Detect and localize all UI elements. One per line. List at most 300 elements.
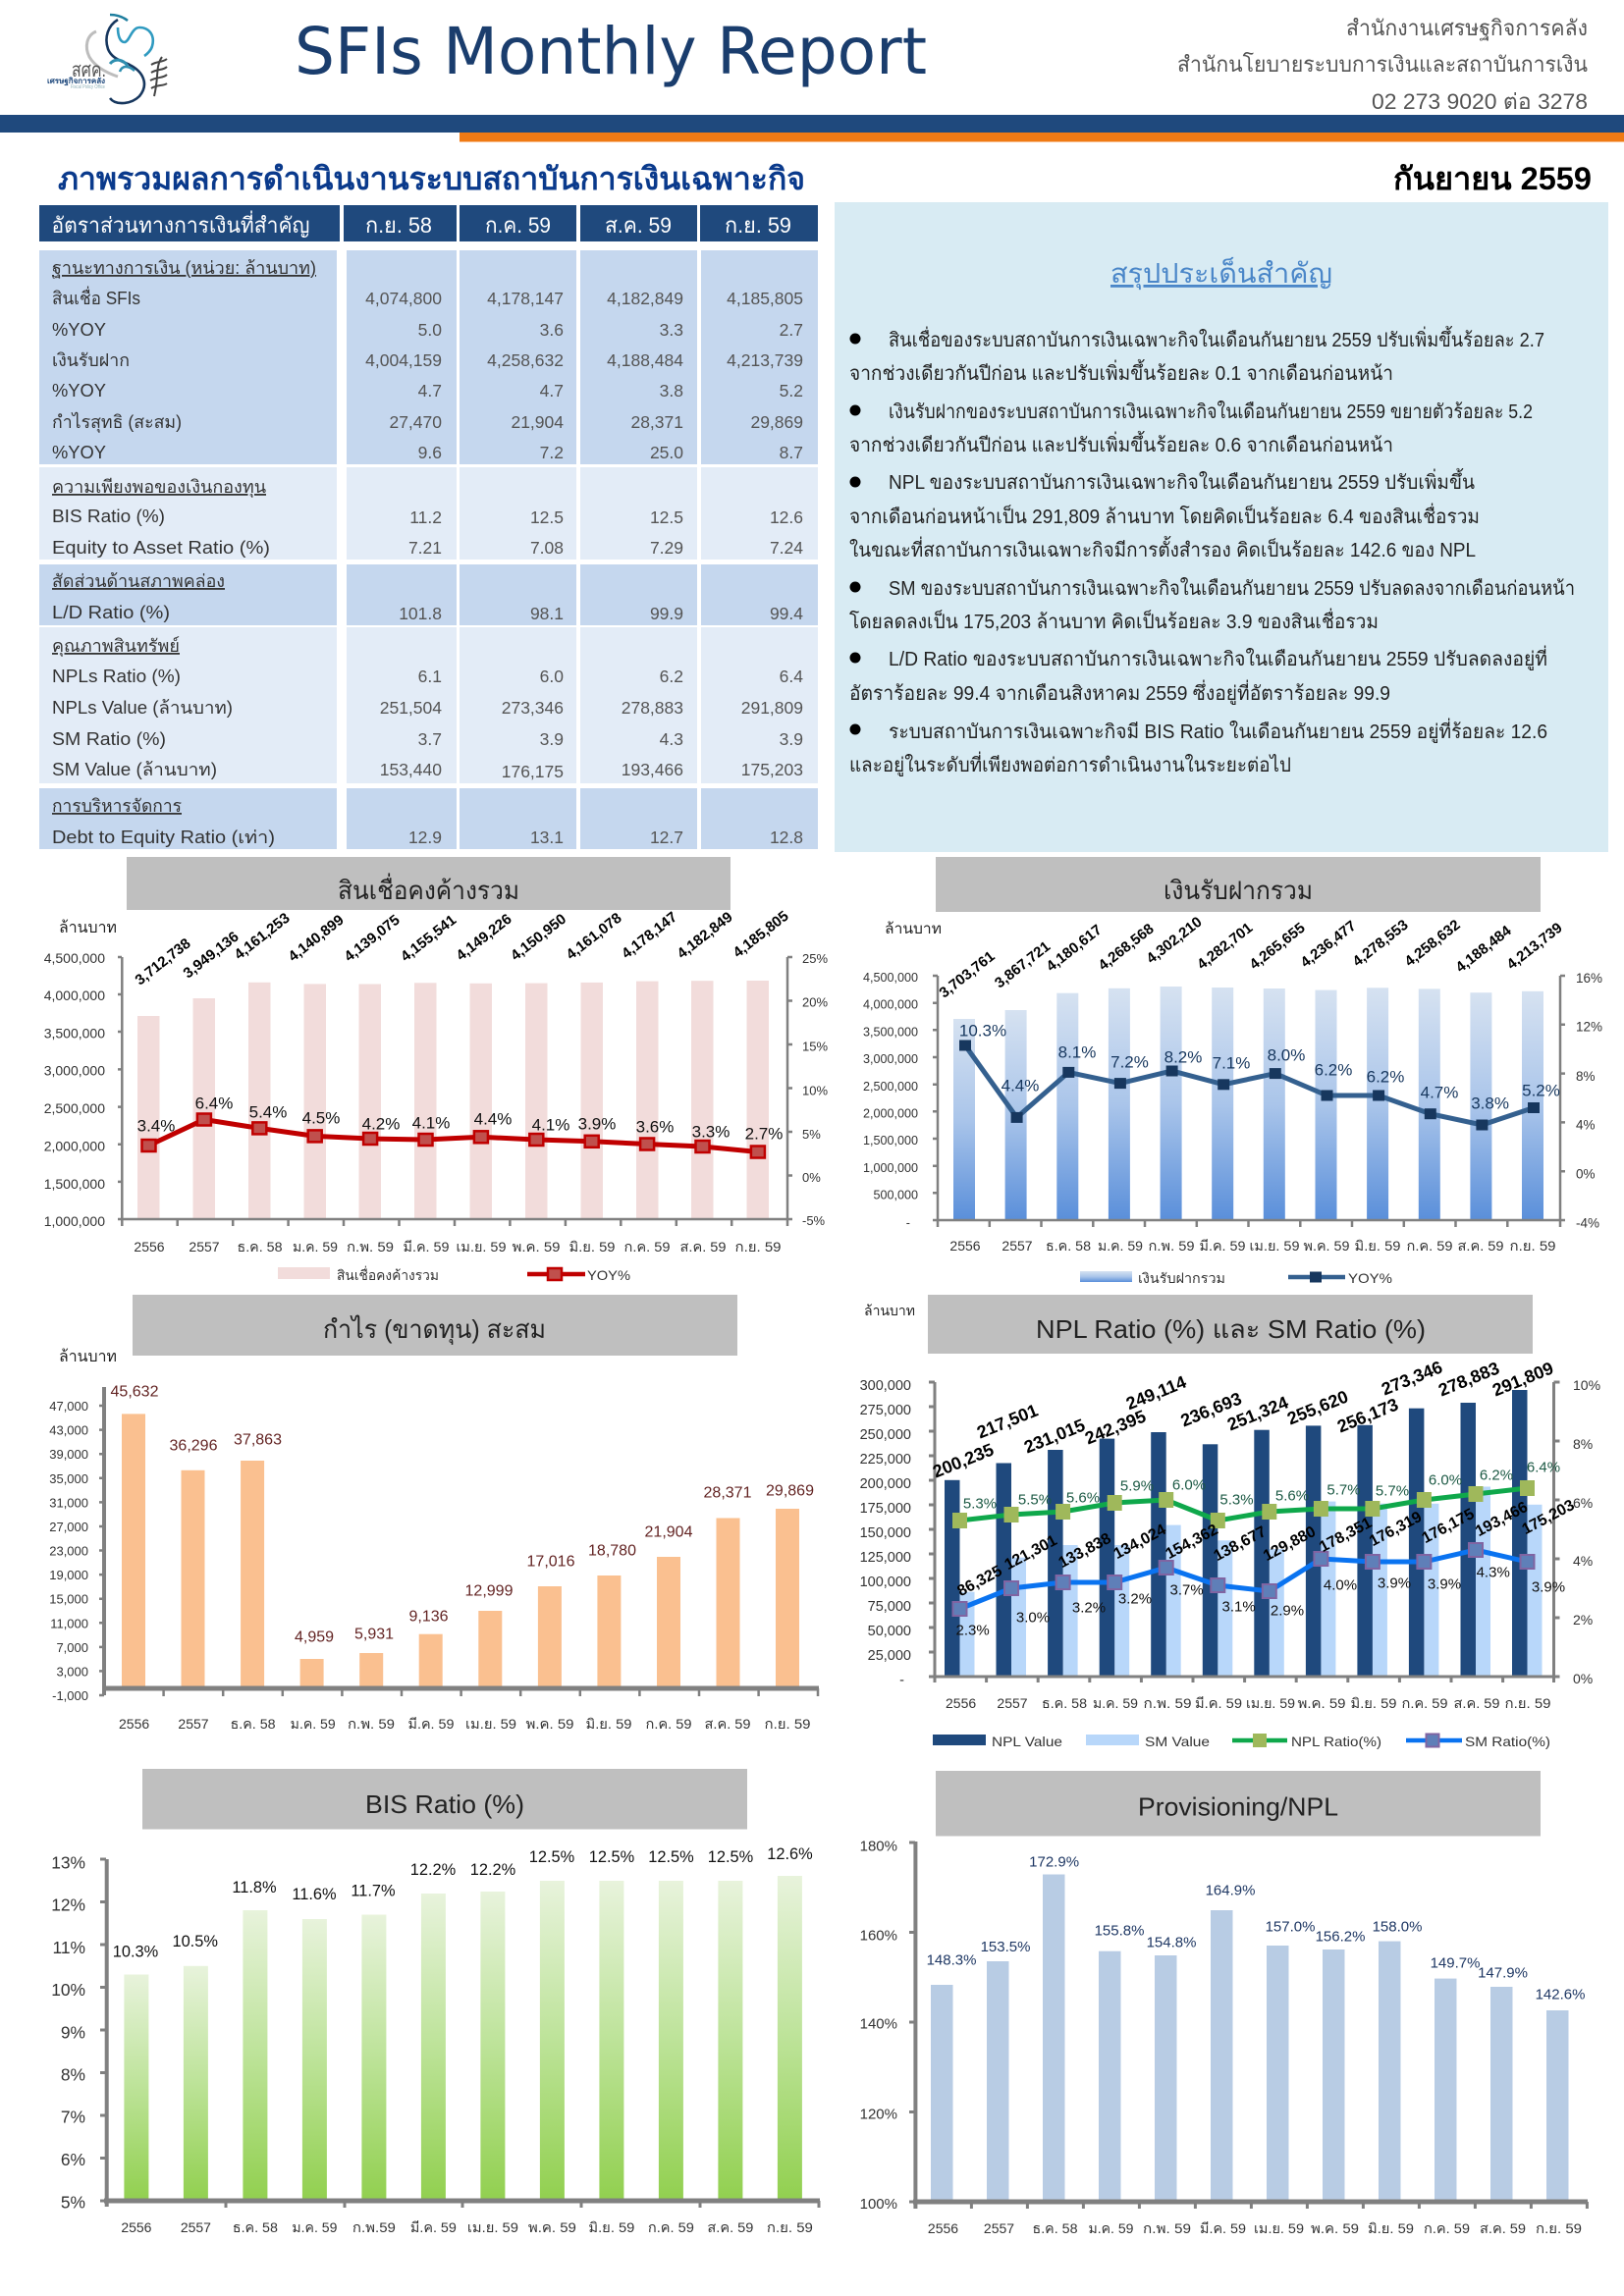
summary text: [849, 326, 1575, 777]
right axis labels: 8%: [1573, 1436, 1593, 1452]
bar value labels: 12.6%: [767, 1845, 813, 1863]
NPL ratio labels: 5.5%: [1018, 1492, 1052, 1508]
table values: 9.6: [418, 443, 442, 462]
category labels: มี.ค. 59: [1200, 1238, 1246, 1254]
summary text: โดยลดลงเป็น 175,203 ล้านบาท คิดเป็นร้อยละ 3.9 ของสินเชื่อรวม: [849, 608, 1379, 633]
table values: 12.5: [530, 507, 564, 527]
YOY data labels: 3.8%: [1471, 1094, 1509, 1113]
table values: 4.7: [418, 381, 442, 400]
table values: 291,809: [741, 698, 803, 718]
left axis labels: 100%: [860, 2196, 897, 2213]
summary text: ในขณะที่สถาบันการเงินเฉพาะกิจมีการตั้งสำรอง คิดเป็นร้อยละ 142.6 ของ NPL: [849, 536, 1476, 561]
category labels: ม.ค. 59: [292, 2219, 338, 2235]
table values: 4,258,632: [487, 350, 564, 370]
right axis labels: 4%: [1573, 1553, 1593, 1569]
legend: [933, 1734, 1550, 1749]
table row labels: เงินรับฝาก: [52, 350, 130, 370]
chart heading: [133, 1295, 737, 1356]
left axis labels: 9%: [61, 2022, 85, 2042]
SM ratio labels: 3.0%: [1016, 1610, 1050, 1626]
SM value labels: 138,677: [1211, 1523, 1270, 1565]
category labels: ก.ค. 59: [1402, 1695, 1448, 1711]
panel: key points summary: [835, 202, 1608, 852]
left axis labels: 150,000: [860, 1525, 911, 1541]
legend: NPL Value: [992, 1734, 1062, 1749]
summary text: และอยู่ในระดับที่เพียงพอต่อการดำเนินงานในระยะต่อไป: [849, 751, 1291, 777]
bar value labels: 4,155,541: [398, 912, 460, 965]
NPL ratio labels: 5.7%: [1326, 1482, 1361, 1498]
summary text: สินเชื่อของระบบสถาบันการเงินเฉพาะกิจในเดือนกันยายน 2559 ปรับเพิ่มขึ้นร้อยละ 2.7: [889, 326, 1544, 351]
table values: 7.08: [530, 538, 564, 558]
left axis labels: 120%: [860, 2107, 897, 2122]
left axis labels: [49, 1399, 88, 1703]
table values: 4,185,805: [727, 289, 803, 308]
table values: 99.9: [650, 604, 683, 623]
category labels: 2557: [178, 1716, 209, 1732]
table values: 98.1: [530, 604, 564, 623]
right axis labels: -5%: [802, 1213, 826, 1228]
bar value labels: 4,185,805: [730, 908, 792, 961]
right axis labels: 2%: [1573, 1612, 1593, 1628]
right axis labels: -4%: [1576, 1215, 1599, 1231]
category labels: 2556: [119, 1716, 149, 1732]
left axis labels: 140%: [860, 2016, 897, 2032]
YOY data labels: [137, 1094, 783, 1143]
left axis labels: 2,500,000: [44, 1100, 105, 1116]
YOY data labels: 4.7%: [1421, 1084, 1458, 1101]
left axis labels: 6%: [61, 2150, 85, 2169]
left axis labels: [51, 1853, 85, 2212]
NPL value labels: 278,883: [1435, 1359, 1502, 1400]
chart heading: Provisioning/NPL: [1138, 1792, 1338, 1822]
panel: financial ratio table: [39, 205, 818, 849]
YOY data labels: 4.4%: [474, 1109, 512, 1129]
legend: [1080, 1270, 1392, 1286]
summary text: จากเดือนก่อนหน้าเป็น 291,809 ล้านบาท โดยคิดเป็นร้อยละ 6.4 ของสินเชื่อรวม: [849, 503, 1480, 528]
NPL value bars: [945, 1390, 1528, 1677]
category labels: ก.ค. 59: [1406, 1238, 1453, 1254]
bar value labels: [113, 1845, 813, 1961]
axes: [933, 976, 1565, 1227]
bar value labels: [132, 908, 792, 988]
category labels: [946, 1695, 1551, 1711]
table values: 7.21: [408, 538, 442, 558]
title: SFIs Monthly Report: [295, 14, 927, 89]
table values: 12.8: [770, 828, 803, 847]
bar value labels: 4,302,210: [1143, 914, 1206, 967]
table header: ส.ค. 59: [605, 213, 672, 238]
left axis labels: 3,500,000: [44, 1025, 105, 1041]
YOY data labels: 10.3%: [959, 1021, 1006, 1041]
YOY data labels: 4.4%: [1001, 1076, 1039, 1095]
panel: BIS ratio chart: [51, 1769, 820, 2235]
category labels: 2557: [181, 2219, 211, 2235]
category labels: ก.ค. 59: [648, 2219, 694, 2235]
table values: 6.2: [660, 667, 683, 686]
summary text: จากช่วงเดียวกันปีก่อน และปรับเพิ่มขึ้นร้อยละ 0.1 จากเดือนก่อนหน้า: [849, 359, 1393, 385]
table values: 4.3: [660, 729, 683, 749]
YOY data labels: 7.1%: [1213, 1054, 1250, 1072]
table values: 4.7: [540, 381, 564, 400]
category labels: 2556: [946, 1695, 976, 1711]
left axis labels: 225,000: [860, 1452, 911, 1468]
table values: 278,883: [622, 698, 683, 718]
unit label: ล้านบาท: [59, 1348, 117, 1365]
bar value labels: 10.5%: [172, 1933, 218, 1950]
table row labels: Equity to Asset Ratio (%): [52, 538, 270, 558]
YOY data labels: 4.1%: [532, 1115, 569, 1135]
bar value labels: [111, 1384, 814, 1645]
left axis labels: 4,000,000: [863, 998, 918, 1012]
table row labels: SM Value (ล้านบาท): [52, 760, 217, 779]
line: NPL ratio: [952, 1480, 1535, 1528]
bar value labels: 10.3%: [113, 1944, 158, 1961]
bar value labels: 157.0%: [1266, 1918, 1315, 1936]
table header: ก.ค. 59: [485, 213, 551, 238]
category labels: มี.ค. 59: [1200, 2220, 1246, 2236]
chart heading: [928, 1295, 1533, 1354]
table values: 2.7: [780, 320, 803, 340]
NPL value labels: 273,346: [1379, 1358, 1445, 1399]
table row labels: [52, 258, 316, 847]
category labels: พ.ค. 59: [1298, 1695, 1346, 1711]
table values: 27,470: [389, 412, 442, 432]
left axis labels: 35,000: [49, 1471, 88, 1486]
SM ratio labels: 4.0%: [1324, 1576, 1357, 1594]
table values: 12.9: [408, 828, 442, 847]
YOY data labels: 4.2%: [362, 1115, 400, 1133]
left axis labels: 100,000: [860, 1575, 911, 1590]
table values: 6.4: [780, 667, 803, 686]
table values: 7.2: [540, 443, 564, 462]
table row labels: L/D Ratio (%): [52, 603, 170, 622]
left axis labels: 160%: [860, 1928, 897, 1944]
left axis labels: [860, 1378, 911, 1688]
bar value labels: 155.8%: [1095, 1922, 1144, 1940]
NPL value labels: 242,395: [1082, 1407, 1149, 1448]
left axis labels: 4,000,000: [44, 988, 105, 1003]
left axis labels: 180%: [860, 1838, 897, 1855]
left axis labels: 25,000: [868, 1648, 911, 1664]
category labels: ก.ค. 59: [624, 1239, 671, 1255]
legend: เงินรับฝากรวม: [1138, 1270, 1225, 1286]
left axis labels: 300,000: [860, 1378, 911, 1394]
left axis labels: 11,000: [50, 1616, 88, 1630]
summary text: ระบบสถาบันการเงินเฉพาะกิจมี BIS Ratio ในเดือนกันยายน 2559 อยู่ที่ร้อยละ 12.6: [889, 718, 1547, 744]
left axis labels: 7,000: [56, 1640, 88, 1655]
bar value labels: 11.6%: [292, 1886, 337, 1903]
summary text: จากช่วงเดียวกันปีก่อน และปรับเพิ่มขึ้นร้อยละ 0.6 จากเดือนก่อนหน้า: [849, 431, 1393, 456]
right axis labels: 0%: [1573, 1671, 1593, 1686]
SM value labels: 193,466: [1473, 1499, 1531, 1540]
icon: organisation logo: เศรษฐกิจการคลัง: [47, 77, 105, 86]
header band: [0, 115, 1624, 141]
left axis labels: 3,000,000: [863, 1052, 918, 1066]
right axis labels: [802, 951, 828, 1228]
left axis labels: 75,000: [868, 1599, 911, 1615]
category labels: ธ.ค. 58: [233, 2219, 278, 2235]
bar value labels: 4,282,701: [1194, 920, 1256, 973]
category labels: [949, 1238, 1556, 1254]
left axis labels: 3,500,000: [863, 1025, 918, 1039]
table values: 5.2: [780, 381, 803, 400]
YOY data labels: 3.6%: [636, 1117, 674, 1137]
category labels: ม.ค. 59: [1098, 1238, 1143, 1254]
category labels: 2557: [189, 1239, 220, 1255]
left axis labels: 1,500,000: [44, 1176, 105, 1192]
bar value labels: 3,712,738: [132, 935, 194, 988]
table values: 29,869: [750, 412, 803, 432]
YOY data labels: 2.7%: [745, 1125, 783, 1143]
summary text: L/D Ratio ของระบบสถาบันการเงินเฉพาะกิจในเดือนกันยายน 2559 ปรับลดลงอยู่ที่: [889, 645, 1547, 671]
table values: 21,904: [511, 412, 564, 432]
table header: ก.ย. 58: [365, 213, 432, 238]
category labels: ส.ค. 59: [707, 2219, 754, 2235]
YOY data labels: 8.0%: [1268, 1046, 1305, 1064]
category labels: ก.พ. 59: [347, 1239, 394, 1255]
table row labels: คุณภาพสินทรัพย์: [52, 636, 180, 657]
left axis labels: 1,500,000: [863, 1134, 918, 1148]
table row labels: SM Ratio (%): [52, 729, 166, 749]
bar value labels: 3,949,136: [180, 929, 243, 982]
category labels: ม.ค. 59: [293, 1239, 338, 1255]
right axis labels: 10%: [802, 1084, 828, 1097]
table values: 3.8: [660, 381, 683, 400]
YOY data labels: 5.4%: [249, 1103, 287, 1121]
category labels: ก.ย. 59: [1536, 2220, 1582, 2236]
NPL ratio labels: 5.3%: [963, 1496, 997, 1512]
summary text: อัตราร้อยละ 99.4 จากเดือนสิงหาคม 2559 ซึ่งอยู่ที่อัตราร้อยละ 99.9: [849, 679, 1390, 706]
left axis labels: 10%: [51, 1980, 85, 2000]
category labels: 2557: [997, 1695, 1028, 1711]
bar value labels: 21,904: [645, 1523, 693, 1541]
table values: 251,504: [380, 698, 442, 718]
left axis labels: [44, 950, 105, 1229]
left axis labels: 50,000: [868, 1624, 911, 1639]
bar value labels: 29,869: [766, 1482, 814, 1500]
left axis labels: 47,000: [49, 1399, 88, 1414]
bar value labels: 9,136: [408, 1608, 449, 1626]
right axis labels: [1576, 971, 1602, 1231]
right axis labels: 16%: [1576, 971, 1602, 986]
left axis labels: 275,000: [860, 1403, 911, 1418]
left axis labels: 3,000: [56, 1664, 88, 1679]
category labels: ก.ย. 59: [767, 2219, 813, 2235]
table values: 3.3: [660, 320, 683, 340]
bar value labels: 4,182,849: [674, 909, 736, 962]
table values: 4,004,159: [365, 350, 442, 370]
category labels: เม.ย. 59: [465, 1716, 516, 1732]
line: YOY growth: [959, 1041, 1540, 1131]
category labels: ธ.ค. 58: [1033, 2220, 1078, 2236]
YOY data labels: 6.2%: [1315, 1060, 1352, 1080]
left axis labels: 39,000: [49, 1447, 88, 1462]
SM ratio labels: 3.9%: [1428, 1576, 1461, 1592]
NPL ratio labels: 6.0%: [1429, 1472, 1462, 1488]
table values: 4,178,147: [487, 289, 564, 308]
category labels: ม.ค. 59: [291, 1716, 336, 1732]
bars: [931, 1875, 1569, 2200]
left axis labels: -1,000: [52, 1688, 88, 1703]
legend: สินเชื่อคงค้างรวม: [337, 1266, 439, 1283]
category labels: [928, 2220, 1582, 2236]
table values: 3.6: [540, 320, 564, 340]
left axis labels: 3,000,000: [44, 1062, 105, 1078]
left axis labels: 5%: [61, 2192, 85, 2212]
category labels: มี.ค. 59: [408, 1716, 455, 1732]
header contact text: [1177, 16, 1588, 114]
left axis labels: 1,000,000: [44, 1213, 105, 1229]
table values: 11.2: [409, 507, 442, 527]
left axis labels: 1,000,000: [863, 1161, 918, 1175]
bar value labels: 28,371: [704, 1484, 752, 1502]
left axis labels: -: [906, 1216, 910, 1230]
NPL value labels: 200,235: [930, 1440, 997, 1481]
bars: [953, 987, 1543, 1220]
category labels: ก.ย. 59: [734, 1239, 782, 1255]
bar value labels: 147.9%: [1478, 1965, 1528, 1981]
category labels: ก.ค. 59: [646, 1716, 692, 1732]
NPL value labels: 291,809: [1489, 1359, 1556, 1400]
bar value labels: 12.5%: [648, 1848, 694, 1866]
left axis labels: 12%: [51, 1896, 85, 1915]
panel: accumulated profit chart: [49, 1295, 819, 1732]
bars: [137, 981, 769, 1219]
NPL value labels: 236,693: [1178, 1389, 1244, 1430]
category labels: มิ.ย. 59: [1355, 1238, 1401, 1254]
left axis labels: 200,000: [860, 1476, 911, 1492]
legend: YOY%: [587, 1267, 630, 1283]
table header: ก.ย. 59: [725, 213, 791, 238]
NPL value labels: 231,015: [1021, 1415, 1088, 1457]
line: SM ratio: [952, 1543, 1534, 1616]
SM ratio labels: 3.7%: [1169, 1582, 1204, 1598]
NPL value labels: 256,173: [1334, 1395, 1401, 1436]
NPL ratio labels: 6.4%: [1527, 1459, 1560, 1476]
SM ratio labels: 3.9%: [1532, 1578, 1565, 1596]
header contact text: สำนักงานเศรษฐกิจการคลัง: [1346, 16, 1588, 41]
bar value labels: 12.5%: [529, 1848, 574, 1866]
table values: 7.24: [770, 538, 803, 558]
SM ratio labels: 3.2%: [1118, 1590, 1152, 1608]
bar value labels: 142.6%: [1536, 1987, 1585, 2002]
bar value labels: 11.8%: [232, 1879, 277, 1896]
YOY data labels: 8.2%: [1164, 1048, 1202, 1066]
icon: organisation logo: สศค.: [72, 60, 106, 81]
axes: [118, 957, 792, 1226]
left axis labels: 250,000: [860, 1427, 911, 1443]
bar value labels: 4,959: [295, 1629, 334, 1645]
category labels: เม.ย. 59: [456, 1239, 507, 1255]
table row labels: NPLs Value (ล้านบาท): [52, 698, 233, 718]
left axis labels: 31,000: [49, 1495, 88, 1510]
bar value labels: 4,140,899: [285, 912, 348, 965]
left axis labels: 27,000: [49, 1520, 88, 1534]
category labels: ก.ย. 59: [764, 1716, 811, 1732]
left axis labels: 500,000: [873, 1189, 918, 1202]
SM value labels: 134,024: [1110, 1522, 1169, 1563]
bar value labels: 158.0%: [1373, 1918, 1422, 1936]
right axis labels: 25%: [802, 951, 828, 966]
category labels: มิ.ย. 59: [585, 1716, 632, 1732]
category labels: มิ.ย. 59: [569, 1239, 616, 1255]
right axis labels: 0%: [802, 1170, 821, 1185]
YOY data labels: 3.4%: [137, 1117, 175, 1135]
right axis labels: 8%: [1576, 1069, 1596, 1084]
bar value labels: 148.3%: [927, 1951, 976, 1969]
table values: 3.9: [540, 729, 564, 749]
bar value labels: 17,016: [527, 1553, 575, 1571]
category labels: ธ.ค. 58: [238, 1239, 283, 1255]
left axis labels: -: [899, 1673, 904, 1688]
SM ratio labels: 3.1%: [1221, 1598, 1256, 1616]
bar value labels: 4,236,477: [1297, 918, 1360, 971]
summary text: SM ของระบบสถาบันการเงินเฉพาะกิจในเดือนกันยายน 2559 ปรับลดลงจากเดือนก่อนหน้า: [889, 577, 1575, 600]
table row labels: %YOY: [52, 381, 106, 400]
bar value labels: 4,265,655: [1246, 920, 1309, 973]
bar value labels: 149.7%: [1431, 1955, 1480, 1971]
legend: SM Value: [1145, 1734, 1210, 1749]
NPL ratio labels: 6.2%: [1480, 1467, 1513, 1484]
YOY data labels: 4.5%: [302, 1109, 340, 1127]
table values: 153,440: [380, 760, 442, 779]
category labels: 2556: [928, 2220, 958, 2236]
bar value labels: 4,150,950: [508, 911, 569, 964]
category labels: [134, 1239, 782, 1255]
bar value labels: [936, 914, 1566, 1001]
YOY data labels: 3.3%: [692, 1123, 730, 1141]
table values: 101.8: [399, 604, 442, 623]
bar value labels: 154.8%: [1147, 1934, 1196, 1951]
right axis labels: 4%: [1576, 1117, 1596, 1133]
left axis labels: 7%: [61, 2108, 85, 2127]
category labels: มี.ค. 59: [403, 1239, 450, 1255]
category labels: มี.ค. 59: [1195, 1695, 1242, 1711]
chart heading: เงินรับฝากรวม: [1164, 876, 1313, 905]
axes: [929, 1382, 1559, 1682]
table values: 6.1: [418, 667, 442, 686]
NPL value labels: [930, 1358, 1556, 1481]
left axis labels: 13%: [51, 1853, 85, 1873]
NPL ratio labels: 5.6%: [1275, 1488, 1309, 1504]
SM value labels: 154,362: [1163, 1522, 1221, 1563]
bar value labels: 3,867,721: [992, 938, 1054, 991]
NPL value labels: 251,324: [1224, 1393, 1291, 1434]
table values: 8.7: [780, 443, 803, 462]
NPL ratio labels: [963, 1459, 1560, 1512]
category labels: 2557: [984, 2220, 1014, 2236]
subtitle: ภาพรวมผลการดำเนินงานระบบสถาบันการเงินเฉพาะกิจ: [58, 161, 805, 196]
table values: 99.4: [770, 604, 803, 623]
SM value labels: 176,175: [1419, 1506, 1478, 1547]
chart heading: [142, 1769, 747, 1830]
bar value labels: 36,296: [170, 1437, 218, 1455]
table values: 4,074,800: [365, 289, 442, 308]
chart heading: BIS Ratio (%): [365, 1789, 524, 1819]
table header: อัตราส่วนทางการเงินที่สำคัญ: [51, 210, 310, 238]
icon: organisation logo: Fiscal Policy Office: [71, 84, 105, 90]
right axis labels: 0%: [1576, 1166, 1596, 1182]
unit label: ล้านบาท: [864, 1303, 915, 1318]
category labels: ส.ค. 59: [1480, 2220, 1526, 2236]
NPL ratio labels: 6.0%: [1172, 1476, 1206, 1494]
category labels: ก.พ. 59: [1149, 1238, 1195, 1254]
bar value labels: 45,632: [111, 1384, 159, 1400]
panel: total deposits chart: [863, 857, 1602, 1286]
bar value labels: 153.5%: [981, 1939, 1030, 1955]
table row labels: ฐานะทางการเงิน (หน่วย: ล้านบาท): [52, 258, 316, 279]
category labels: ก.พ. 59: [1143, 1695, 1192, 1711]
